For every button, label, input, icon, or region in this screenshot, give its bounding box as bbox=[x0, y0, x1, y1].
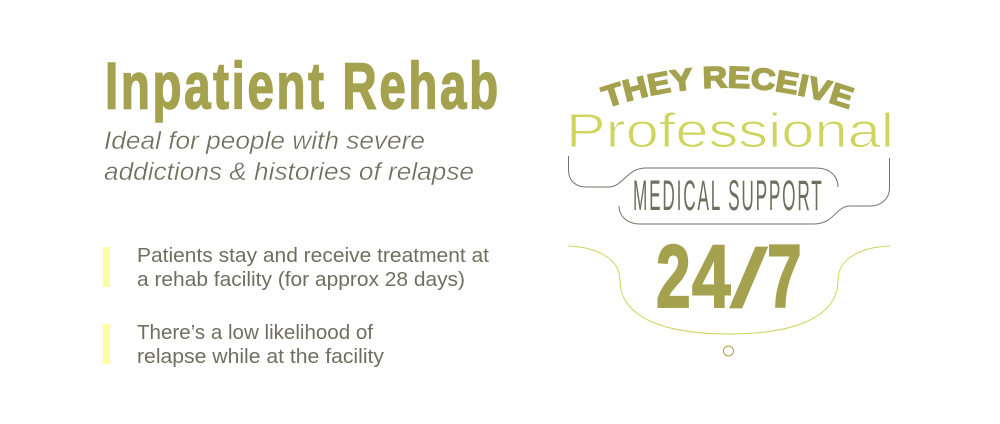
label: medical support: MEDICAL SUPPORT bbox=[633, 171, 822, 219]
number: 24/7: / bbox=[731, 232, 767, 324]
badge bbox=[566, 66, 894, 356]
frame: medical support lower bbox=[619, 158, 890, 224]
frame: medical support upper bbox=[568, 156, 838, 187]
number: 24/7: 2 bbox=[656, 227, 691, 327]
title: Inpatient Rehab bbox=[105, 50, 498, 123]
bullet: facility stay: Patients stay and receive treatment at bbox=[137, 245, 489, 267]
bullet: facility stay bbox=[103, 245, 489, 291]
arched heading: they receive: THEY RECEIVE bbox=[599, 66, 855, 110]
number: 24/7 bbox=[656, 227, 802, 327]
bullet: low relapse bbox=[103, 322, 384, 368]
subtitle: addictions & histories of relapse bbox=[104, 158, 474, 186]
bullet: facility stay: a rehab facility (for approx 28 days) bbox=[137, 269, 465, 291]
bullet: low relapse: relapse while at the facility bbox=[137, 346, 384, 368]
icon: small circle bbox=[724, 346, 734, 356]
subtitle: Ideal for people with severe bbox=[104, 127, 425, 155]
number: 24/7: 7 bbox=[767, 227, 802, 327]
subtitle bbox=[104, 127, 474, 186]
curve: cradle bbox=[568, 246, 890, 334]
bullet: low relapse: There’s a low likelihood of bbox=[137, 322, 373, 344]
heading: professional: Professional bbox=[566, 105, 894, 158]
number: 24/7: 4 bbox=[692, 227, 731, 326]
